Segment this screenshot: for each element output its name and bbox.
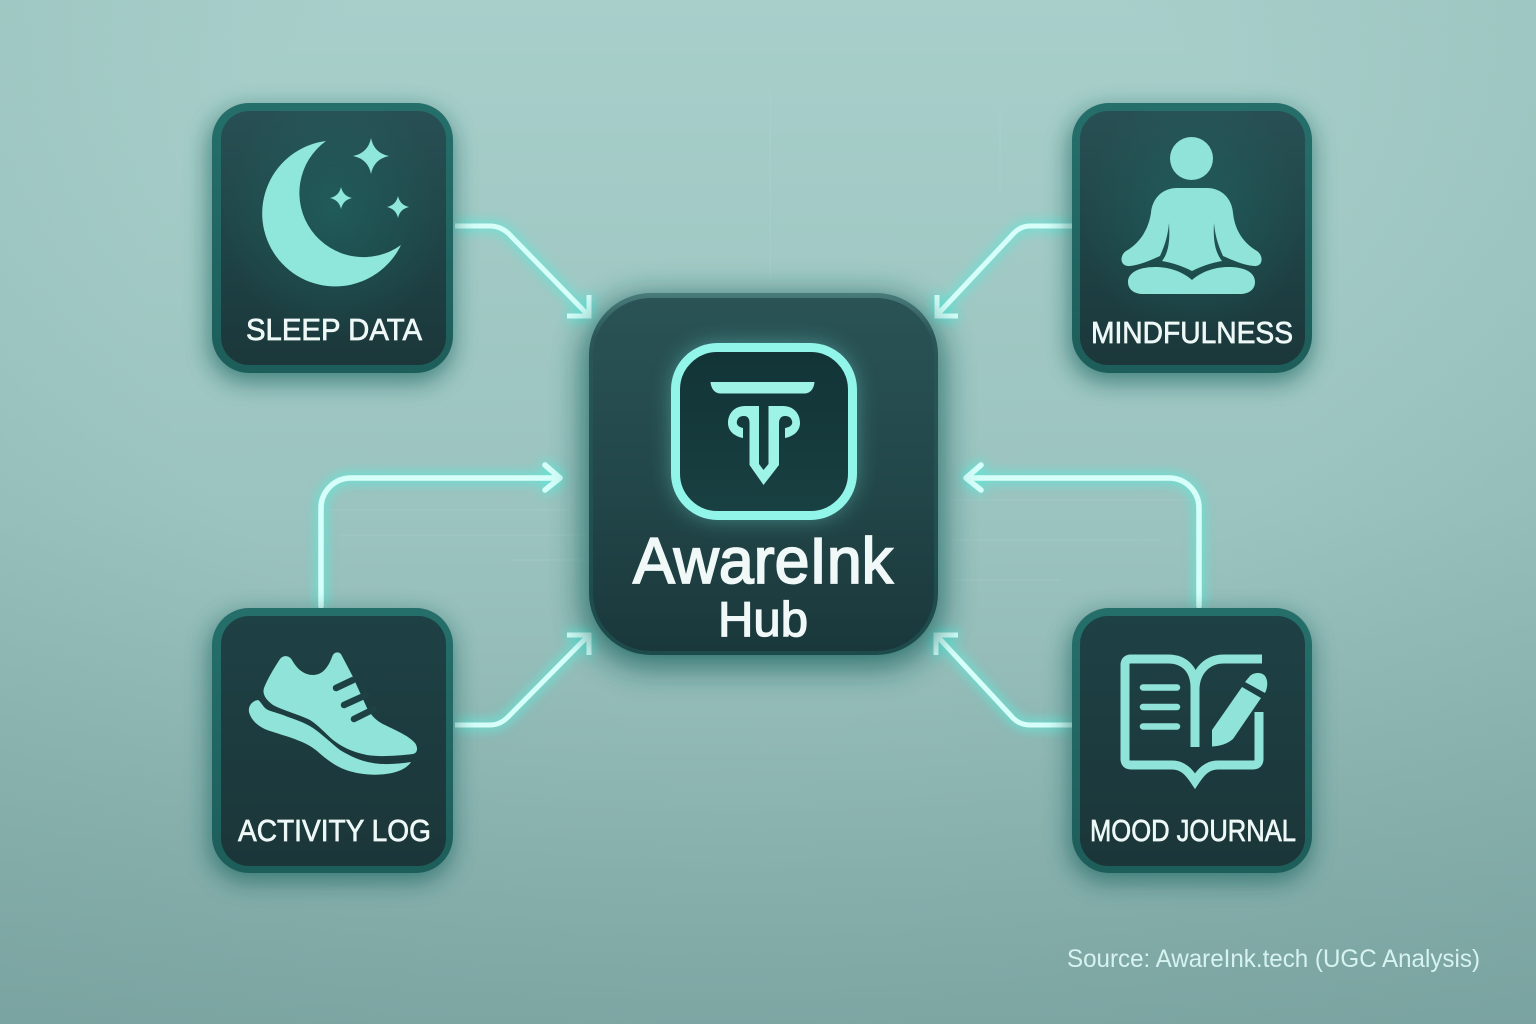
- icon: running shoe: [249, 652, 417, 775]
- label: mood journal: MOOD JOURNAL: [1090, 813, 1296, 848]
- arrow: activity log to hub: [455, 635, 589, 725]
- panel: central hub: [583, 293, 943, 667]
- icon: pillar pen logo: [710, 382, 814, 485]
- arrow: mood journal up and over to hub: [966, 465, 1199, 606]
- logo frame: [676, 348, 852, 516]
- label: mindfulness: MINDFULNESS: [1091, 315, 1293, 350]
- arrow: mood journal to hub: [936, 635, 1072, 725]
- arrow: mindfulness to hub: [937, 226, 1072, 316]
- title: AwareInk: AwareInk: [633, 524, 893, 597]
- arrow: activity log up and over to hub: [321, 465, 560, 606]
- arrow: sleep data to hub: [455, 226, 589, 316]
- panel: mindfulness: [1069, 103, 1312, 382]
- icon: meditating figure: [1121, 137, 1262, 294]
- panel: mood journal: [1069, 608, 1312, 882]
- subtitle: Hub: Hub: [718, 593, 808, 647]
- label: activity log: ACTIVITY LOG: [238, 813, 431, 848]
- source note: Source: AwareInk.tech (UGC Analysis): [1067, 945, 1480, 973]
- label: sleep data: SLEEP DATA: [246, 312, 422, 347]
- panel: activity log: [209, 608, 453, 882]
- icon: moon and stars: [262, 138, 409, 286]
- panel: sleep data: [209, 103, 453, 382]
- icon: open book and pencil: [1125, 659, 1267, 781]
